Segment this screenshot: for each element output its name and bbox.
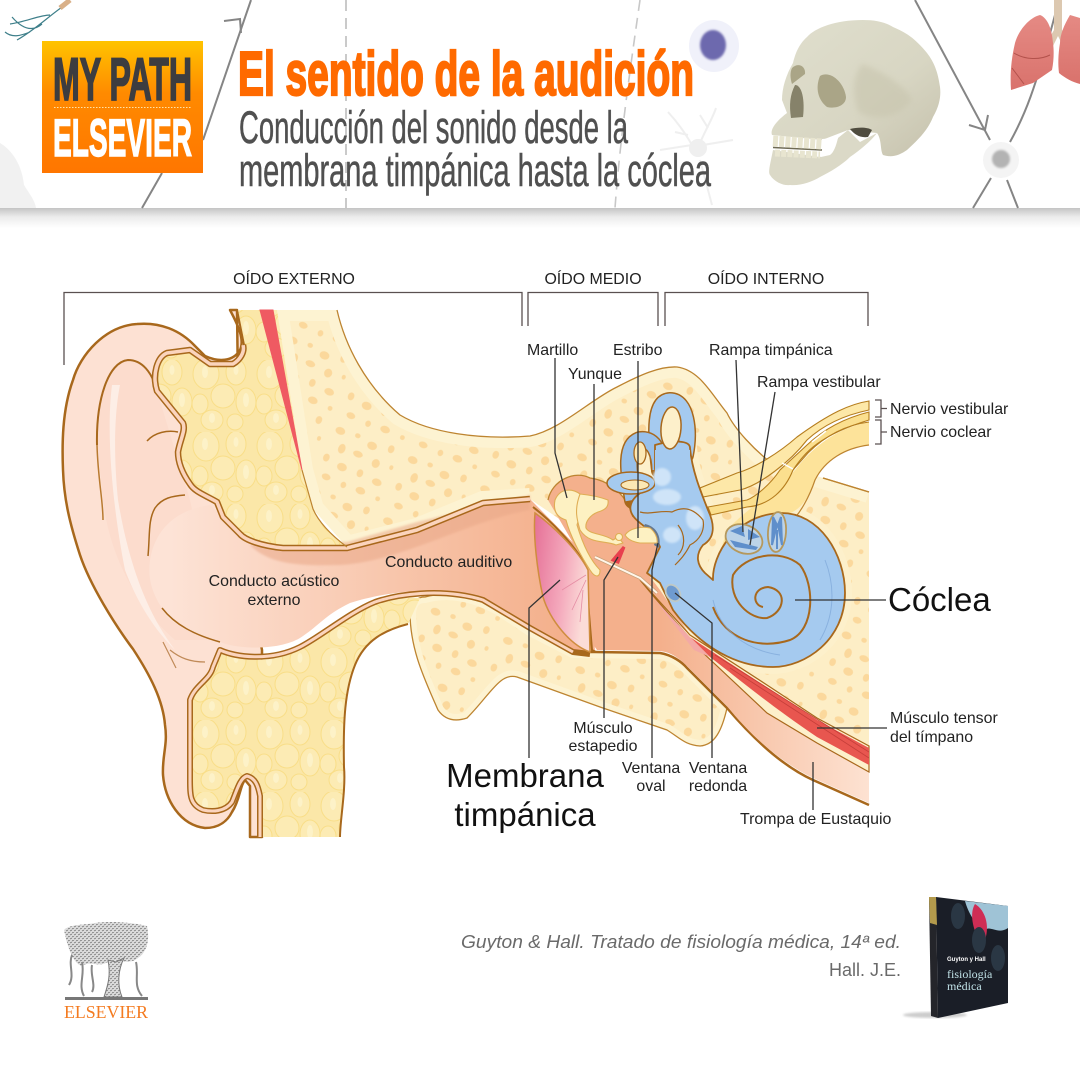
label: Nervio coclear — [875, 420, 992, 444]
label: Conducto auditivo: Conducto auditivo — [385, 554, 512, 571]
ear anatomy diagram — [63, 310, 869, 837]
tensor tympani muscle — [690, 637, 869, 765]
label: Músculo tensor del tímpano: del tímpano — [890, 729, 973, 746]
upper double outline — [155, 310, 530, 548]
teeth — [773, 148, 822, 150]
cover text: fisiología — [947, 967, 993, 981]
thin pink tube — [643, 587, 710, 657]
lower fat tissue — [190, 598, 420, 837]
upper fat tissue — [155, 310, 347, 547]
label: Músculo estapedio — [569, 557, 638, 755]
label: Ventana oval — [622, 543, 680, 795]
label: Yunque — [568, 366, 622, 500]
label: Nervio coclear: Nervio coclear — [890, 424, 992, 441]
icon: grey cell — [983, 142, 1019, 178]
label: Músculo estapedio: estapedio — [569, 738, 638, 755]
cavity outline — [548, 475, 633, 517]
mandible — [769, 130, 877, 185]
ear canal — [149, 499, 595, 652]
heading: oído medio: OÍDO MEDIO — [544, 269, 642, 288]
label: Rampa vestibular — [750, 374, 881, 545]
ossicles — [554, 490, 657, 576]
label: Ventana oval: Ventana — [622, 760, 680, 777]
header banner — [0, 0, 1080, 228]
incus — [577, 494, 623, 545]
citation — [461, 932, 901, 980]
citation: Guyton & Hall. Tratado de fisiología médica, 14ª ed. — [461, 932, 901, 952]
label: Rampa timpánica — [709, 342, 833, 532]
vestibule and cochlea — [630, 442, 845, 667]
label: Nervio vestibular: Nervio vestibular — [890, 401, 1009, 418]
label: Músculo tensor del tímpano: Músculo tensor — [890, 710, 998, 727]
cover text — [947, 957, 993, 993]
red muscle band — [260, 310, 302, 470]
stapes — [616, 527, 657, 543]
tree crown — [64, 922, 148, 966]
rampas cross-section — [721, 511, 787, 559]
subtitle: membrana timpánica hasta la cóclea — [239, 145, 712, 196]
canal holes and vestibule highlights — [607, 406, 704, 565]
pinna shading — [97, 360, 220, 668]
icon: lungs — [1011, 0, 1080, 90]
label: Trompa de Eustaquio: Trompa de Eustaquio — [740, 811, 892, 828]
chorda white tube inner — [595, 557, 657, 593]
header shadow — [0, 208, 1080, 228]
label: Ventana redonda: Ventana — [689, 760, 747, 777]
label: Cóclea: Cóclea — [888, 581, 991, 618]
nerve bundles — [700, 401, 869, 515]
label: Conducto acústico externo — [209, 573, 340, 609]
book cover — [903, 897, 1008, 1018]
subtitle: Conducción del sonido desde la — [239, 102, 629, 153]
label: Rampa vestibular: Rampa vestibular — [757, 374, 881, 391]
eardrum wedge — [533, 507, 596, 652]
label: Conducto acústico externo: Conducto acústico — [209, 573, 340, 590]
heading: oído interno: OÍDO INTERNO — [708, 269, 824, 288]
logo: My Path Elsevier: MY PATH — [53, 46, 192, 113]
canal shading — [250, 495, 530, 565]
label: Martillo — [527, 342, 578, 498]
ear section brackets — [64, 269, 868, 365]
icon: skull — [769, 20, 940, 185]
middle ear cavity — [548, 475, 869, 803]
chorda white tube — [595, 557, 657, 593]
logo: My Path Elsevier: ELSEVIER — [53, 109, 192, 168]
title: El sentido de la audición — [238, 40, 694, 109]
canal crease — [162, 608, 220, 642]
anatomy labels and leaders — [209, 342, 1009, 833]
label: Ventana oval: oval — [636, 778, 666, 795]
heading: oído medio — [528, 269, 658, 326]
icon: nerve fibre — [5, 0, 70, 40]
spine — [929, 897, 938, 1018]
heading: oído externo: OÍDO EXTERNO — [233, 269, 355, 288]
cover text: Guyton y Hall — [947, 957, 986, 963]
label: Yunque: Yunque — [568, 366, 622, 383]
label: Membrana timpánica: timpánica — [454, 796, 596, 833]
book shadow — [903, 1012, 967, 1018]
heading: oído interno — [665, 269, 868, 326]
lower temporal bone — [410, 594, 727, 746]
temporal bone — [277, 310, 869, 770]
heading: oído externo — [64, 269, 522, 365]
cover text: médica — [947, 979, 982, 993]
malleus — [554, 490, 600, 576]
label: Estribo: Estribo — [613, 342, 663, 359]
cover art — [965, 901, 1008, 931]
tympanic membrane — [534, 513, 590, 652]
cranium — [772, 20, 940, 156]
jaw gap — [821, 138, 838, 157]
ground line — [65, 997, 148, 1000]
logo: My Path Elsevier — [42, 41, 203, 173]
tree vines — [69, 955, 142, 996]
lateral canal — [607, 472, 655, 494]
decorative path lines — [142, 0, 1055, 208]
wordmark: ELSEVIER — [64, 1002, 148, 1022]
label: Ventana redonda: redonda — [689, 778, 747, 795]
oval window — [643, 524, 660, 548]
citation: Hall. J.E. — [829, 960, 901, 980]
stapedius muscle — [613, 547, 624, 562]
label: Martillo: Martillo — [527, 342, 578, 359]
icon: cell — [689, 20, 739, 72]
label: Conducto acústico externo: externo — [247, 592, 301, 609]
subtitle — [239, 102, 712, 196]
icon: faded skull — [0, 143, 36, 208]
round window — [663, 582, 683, 604]
tree trunk — [104, 958, 124, 997]
label: Membrana timpánica: Membrana — [446, 757, 605, 794]
label: Músculo estapedio: Músculo — [573, 720, 633, 737]
auditory tube cream strip — [640, 580, 869, 772]
icon: faded neuron — [660, 108, 733, 205]
label: Rampa timpánica: Rampa timpánica — [709, 342, 833, 359]
label: Músculo tensor del tímpano — [817, 710, 998, 746]
logo: Elsevier tree — [64, 922, 148, 1022]
auditory nerve canal — [713, 422, 869, 575]
pinna — [63, 310, 262, 837]
semicircular canals — [629, 401, 687, 500]
label: Membrana timpánica — [446, 580, 605, 833]
label: Ventana redonda — [675, 593, 747, 795]
lower double outline — [190, 593, 869, 837]
cochlea spiral — [713, 555, 832, 655]
cover — [936, 897, 1008, 1018]
